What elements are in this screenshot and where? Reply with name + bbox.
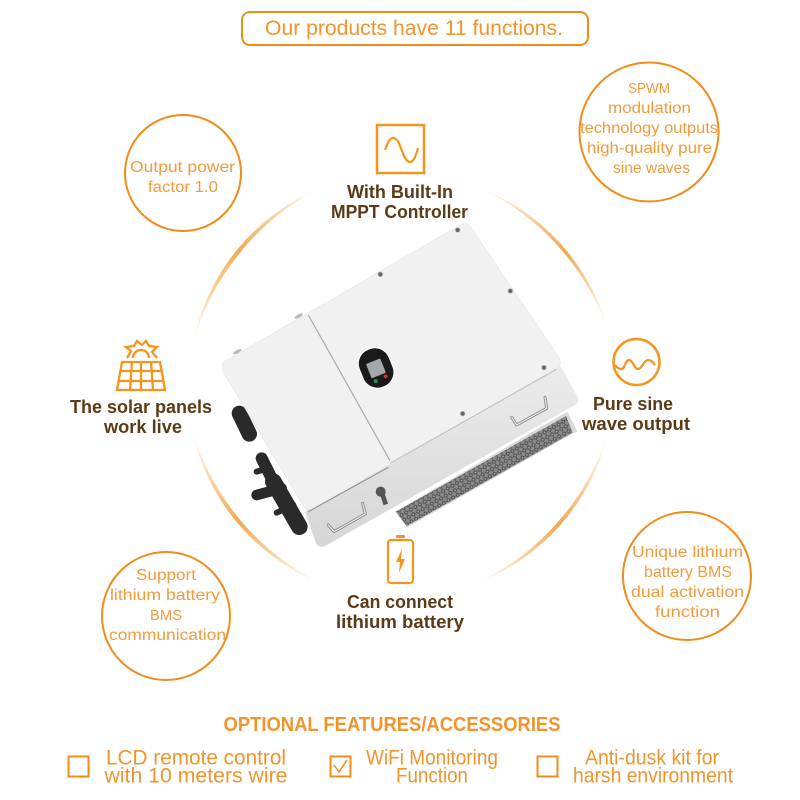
feature: MPPT: MPPT Controller <box>331 202 468 222</box>
callout: SPWM: sine waves <box>613 160 690 177</box>
callout: dual activation: battery BMS <box>644 564 732 581</box>
feature: lithium battery: Can connect <box>347 592 453 612</box>
top latches <box>232 312 304 355</box>
option: anti-dusk: harsh environment <box>573 764 733 788</box>
feature: sine output <box>581 339 690 434</box>
callout: dual activation: Unique lithium <box>632 544 743 561</box>
option: WiFi: WiFi Monitoring <box>366 746 498 770</box>
connectors <box>239 413 299 527</box>
callout: output power factor: factor 1.0 <box>148 179 218 196</box>
callout: dual activation: dual activation <box>631 584 744 601</box>
body side <box>305 365 579 547</box>
callout: lithium BMS communication: lithium battery <box>110 587 220 604</box>
heading: optional features: OPTIONAL FEATURES/ACCESSORIES <box>224 714 560 736</box>
option: WiFi <box>330 746 498 788</box>
screws <box>378 228 546 416</box>
callout: output power factor: Output power <box>130 159 236 176</box>
callout: SPWM: SPWM <box>628 80 670 97</box>
option: WiFi: Function <box>396 764 468 788</box>
callout: lithium BMS communication: communication <box>109 627 226 644</box>
option: anti-dusk <box>538 746 733 788</box>
feature: MPPT <box>331 125 468 222</box>
callout: lithium BMS communication <box>102 552 230 680</box>
callout: lithium BMS communication: BMS <box>150 607 182 624</box>
icon: solar panel <box>117 341 165 390</box>
handles <box>328 397 547 532</box>
title <box>242 12 588 45</box>
central ring <box>192 188 607 583</box>
display panel <box>354 343 399 393</box>
callout: SPWM: technology outputs <box>580 120 718 137</box>
option: LCD <box>68 746 288 788</box>
feature: solar panels: work live <box>103 417 182 437</box>
mesh grille <box>395 412 577 527</box>
feature: sine output: Pure sine <box>593 394 673 414</box>
icon: circled wave <box>614 339 660 385</box>
grounding knob <box>376 487 388 505</box>
icon: sine wave box <box>377 125 424 173</box>
feature: lithium battery: lithium battery <box>336 612 464 632</box>
option: LCD: with 10 meters wire <box>103 764 288 788</box>
icon: battery <box>388 535 413 583</box>
callout: dual activation: function <box>655 604 720 621</box>
inverter product <box>222 224 579 547</box>
feature: sine output: wave output <box>581 414 690 434</box>
callout: dual activation <box>623 512 751 640</box>
option: anti-dusk: Anti-dusk kit for <box>585 746 719 770</box>
callout: output power factor <box>125 115 241 231</box>
top panels <box>222 224 560 510</box>
option: LCD: LCD remote control <box>106 746 286 770</box>
title: Our products have 11 functions. <box>265 17 563 40</box>
callout: SPWM <box>580 62 718 202</box>
feature: solar panels <box>70 341 212 437</box>
callout: SPWM: modulation <box>608 100 691 117</box>
feature: solar panels: The solar panels <box>70 397 212 417</box>
callout: SPWM: high-quality pure <box>587 140 712 157</box>
feature: MPPT: With Built-In <box>347 182 453 202</box>
feature: lithium battery <box>336 535 464 632</box>
callout: lithium BMS communication: Support <box>136 567 197 584</box>
